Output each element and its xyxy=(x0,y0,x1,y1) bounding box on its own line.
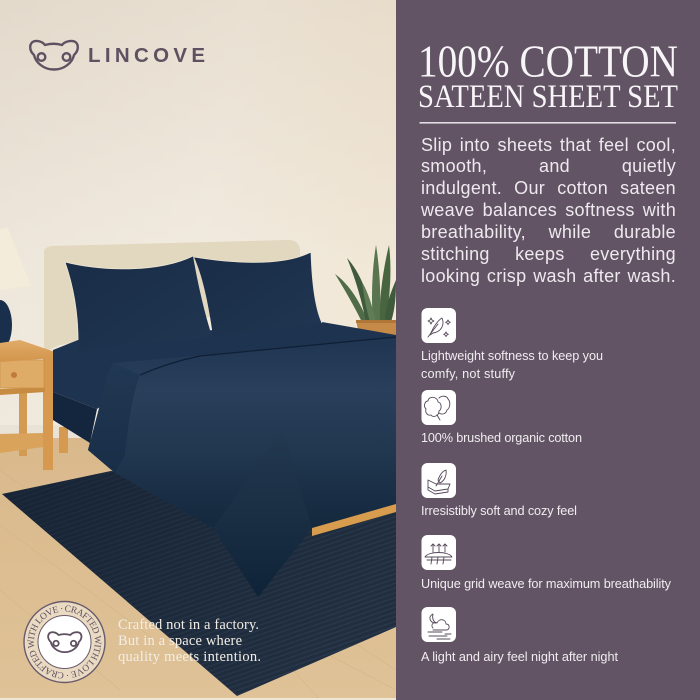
nightstand xyxy=(0,340,58,470)
label: comfy, not stuffy xyxy=(421,367,516,381)
icon: feather with sparkles xyxy=(422,308,456,343)
feature: grid weave xyxy=(421,535,672,591)
bed base xyxy=(53,392,97,443)
duvet xyxy=(88,337,396,597)
logo wordmark: LINCOVE xyxy=(88,44,205,67)
logo mark xyxy=(30,41,78,70)
tagline xyxy=(118,617,261,665)
badge ring text: CRAFTED WITH LOVE · CRAFTED WITH LOVE · xyxy=(28,606,102,678)
logo xyxy=(30,41,205,70)
fitted sheet xyxy=(53,322,396,409)
title divider xyxy=(420,122,676,124)
tagline: quality meets intention. xyxy=(118,649,261,665)
body copy: stitching keeps everything xyxy=(421,244,676,264)
tagline: But in a space where xyxy=(118,633,242,649)
plant xyxy=(335,245,396,335)
title xyxy=(418,36,678,115)
body copy: breathability, while durable xyxy=(421,222,676,242)
feature: light and airy xyxy=(421,607,618,664)
label: Irresistibly soft and cozy feel xyxy=(421,504,577,518)
body copy: indulgent. Our cotton sateen xyxy=(421,178,676,198)
body copy: smooth, and quietly xyxy=(421,156,676,176)
bed frame rail xyxy=(312,504,396,536)
rug xyxy=(2,471,396,696)
headboard xyxy=(44,240,300,352)
body copy: looking crisp wash after wash. xyxy=(421,266,676,286)
bed legs xyxy=(59,427,68,453)
label: Lightweight softness to keep you xyxy=(421,349,603,363)
label: 100% brushed organic cotton xyxy=(421,431,582,445)
feature: lightweight softness xyxy=(421,308,603,381)
body copy: Slip into sheets that feel cool, xyxy=(421,134,676,154)
feature: soft and cozy xyxy=(421,463,577,518)
badge xyxy=(23,600,106,684)
label: Unique grid weave for maximum breathability xyxy=(421,577,672,591)
label: A light and airy feel night after night xyxy=(421,650,618,664)
body copy xyxy=(421,134,676,286)
feature: organic cotton xyxy=(421,390,582,445)
pillow left xyxy=(65,256,212,351)
icon: moon, cloud and breeze xyxy=(422,607,456,642)
bedroom photo scene xyxy=(0,0,396,700)
icon: cotton boll xyxy=(422,390,456,425)
panel: product details xyxy=(396,0,700,700)
badge mark xyxy=(48,632,81,652)
tagline: Crafted not in a factory. xyxy=(118,617,259,633)
pillow right xyxy=(194,252,322,336)
icon: feather on cloth stack xyxy=(422,463,456,498)
body copy: weave balances softness with xyxy=(421,200,676,220)
icon: weave with airflow arrows xyxy=(422,535,456,570)
lamp xyxy=(0,228,31,350)
